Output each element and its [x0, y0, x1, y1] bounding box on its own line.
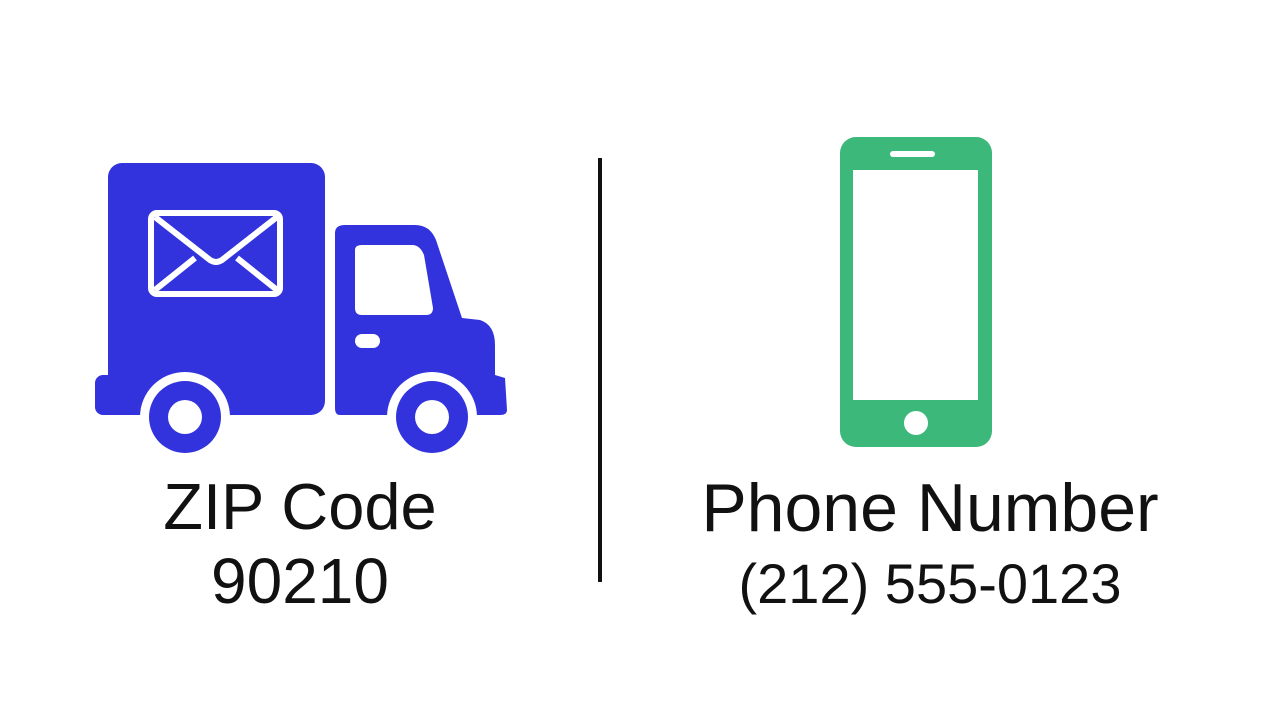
- icon: smartphone: [840, 137, 992, 447]
- truck cab: [335, 225, 507, 415]
- truck body: [95, 163, 325, 415]
- value: 90210: 90210: [211, 545, 389, 617]
- envelope: [151, 213, 280, 294]
- value: phone: (212) 555-0123: [739, 552, 1121, 615]
- wheels: [140, 372, 477, 462]
- label: Phone Number: Phone Number: [701, 470, 1159, 546]
- divider: [598, 158, 602, 582]
- cab window: [355, 245, 433, 315]
- label: ZIP Code: ZIP Code: [163, 470, 437, 543]
